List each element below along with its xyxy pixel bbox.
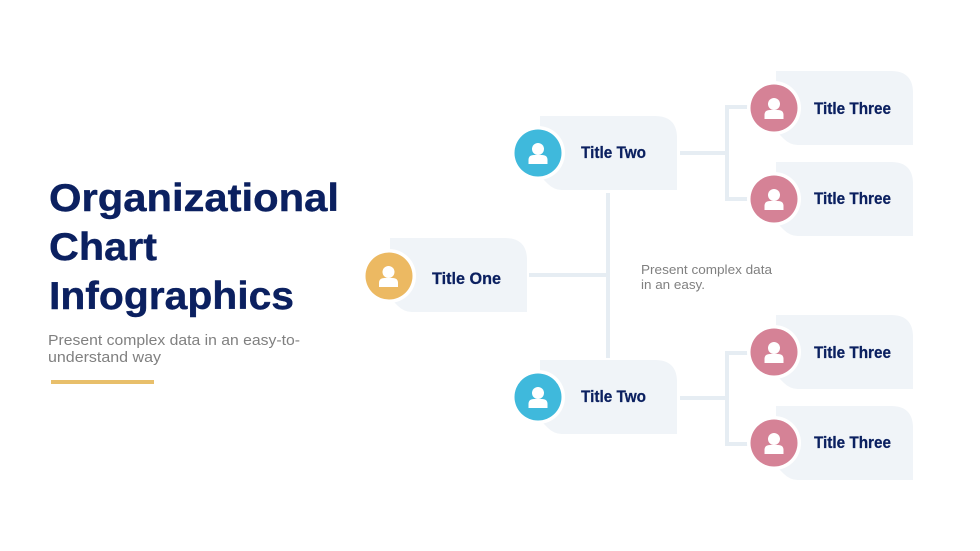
node: Title Three 3: Title Three	[814, 344, 891, 362]
node: Title Three 1	[747, 71, 913, 145]
node: Title Three 2: Title Three	[814, 190, 891, 208]
title	[49, 177, 339, 318]
title: Infographics	[49, 275, 294, 318]
accent line	[51, 380, 154, 384]
note text: Present complex data	[641, 262, 773, 277]
connectors	[529, 107, 750, 444]
subtitle	[48, 332, 300, 366]
node: Title Three 4: Title Three	[814, 434, 891, 452]
node: Title One: Title One	[432, 270, 501, 288]
node: Title Two lower	[511, 360, 677, 434]
subtitle: understand way	[48, 349, 162, 366]
node: Title Three 2	[747, 162, 913, 236]
node: Title Three 3	[747, 315, 913, 389]
node: Title Two upper: Title Two	[581, 144, 646, 162]
subtitle: Present complex data in an easy-to-	[48, 332, 300, 349]
title: Chart	[49, 226, 157, 269]
note text: in an easy.	[641, 277, 705, 292]
note text	[641, 262, 773, 292]
node: Title Two lower: Title Two	[581, 388, 646, 406]
node: Title One	[362, 238, 527, 312]
title: Organizational	[49, 177, 339, 220]
node: Title Three 1: Title Three	[814, 100, 891, 118]
node: Title Two upper	[511, 116, 677, 190]
node: Title Three 4	[747, 406, 913, 480]
